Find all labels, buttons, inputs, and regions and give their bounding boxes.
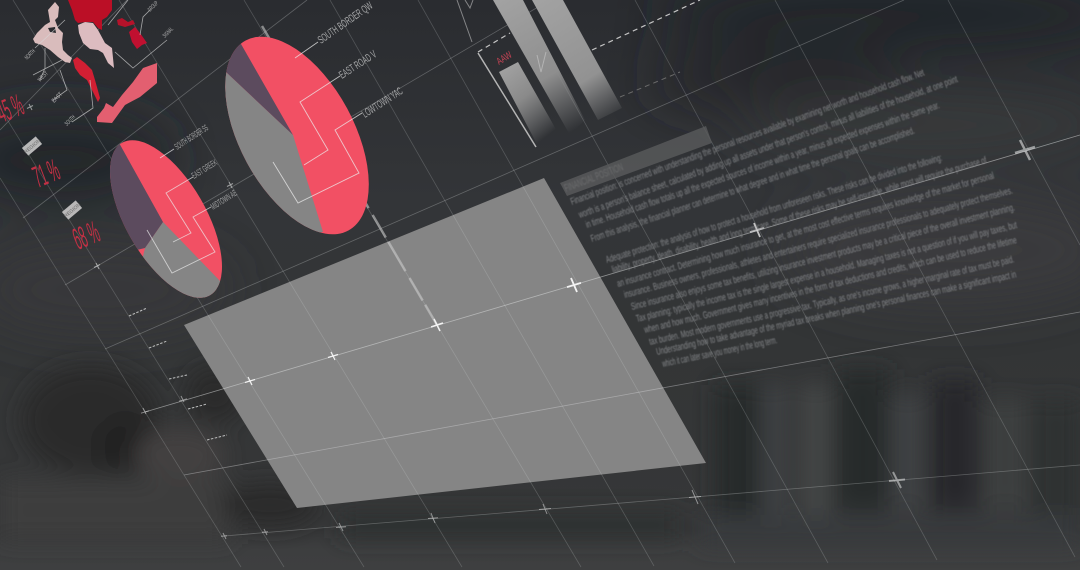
tag: label one: REGION [23,138,42,155]
text block: financial planning paragraphs: which it can later save you money in the long term. [661,335,778,370]
text block: financial planning paragraphs [569,68,1018,370]
callout labels: EAST GREEK [190,157,219,181]
callout labels: SOUTH BORDER SS [173,123,210,152]
chart axis [478,53,536,147]
map: callout labels [24,1,175,127]
heading band: text block title [560,126,712,196]
world map with callouts [24,0,175,127]
map: islands, red [129,27,147,49]
pie chart: small [110,124,238,298]
slice: purple [226,44,293,135]
sparkline marks [457,0,546,72]
pie chart: large [225,1,403,234]
map: archipelago, red [117,18,135,27]
slice: grey [225,72,323,232]
bar label: AAW [495,50,514,68]
callout labels [173,123,239,212]
map: callout labels: WEST [37,71,50,83]
bar one [499,62,562,150]
stat: 71 percent: 71 % [28,152,64,195]
callout labels: LOWTOWN YAC [360,85,405,121]
map: callout labels: NORTH [24,49,37,61]
panel: large grey data plane [184,178,706,508]
heading band: text block title: FINANCIAL POSITION [563,161,625,195]
bar two [493,0,585,135]
tick dashes at the left of the panel [129,308,227,440]
map: callout leader lines [33,0,167,122]
callout lines [147,149,215,273]
chart faint guide [620,72,680,97]
bar three [532,0,622,120]
callout lines [273,42,362,203]
callout labels [316,0,405,121]
map: callout labels: SOUTH [64,115,77,127]
grid intersection markers [27,104,1035,539]
tag: label two: REGION [63,202,82,219]
bar chart: fading columns [457,0,700,150]
slice: purple [110,144,163,250]
chart dashed guides [478,0,700,52]
map: south america, red [73,57,100,102]
map: northern landmass, dark red [68,0,112,30]
map: south continent, light [78,22,114,68]
stat: 68 percent: 68 % [68,214,104,257]
map: southern land, coral [97,63,157,123]
callout labels: EAST ROAD V [337,48,379,82]
map: north america [33,2,72,63]
bright dashed grid segment [262,26,437,325]
slice: grey [143,222,220,298]
callout labels: MIDTOWN AE [209,188,239,212]
map: callout labels: SIGNAL [162,26,175,39]
map: callout labels: EAST [51,92,64,104]
